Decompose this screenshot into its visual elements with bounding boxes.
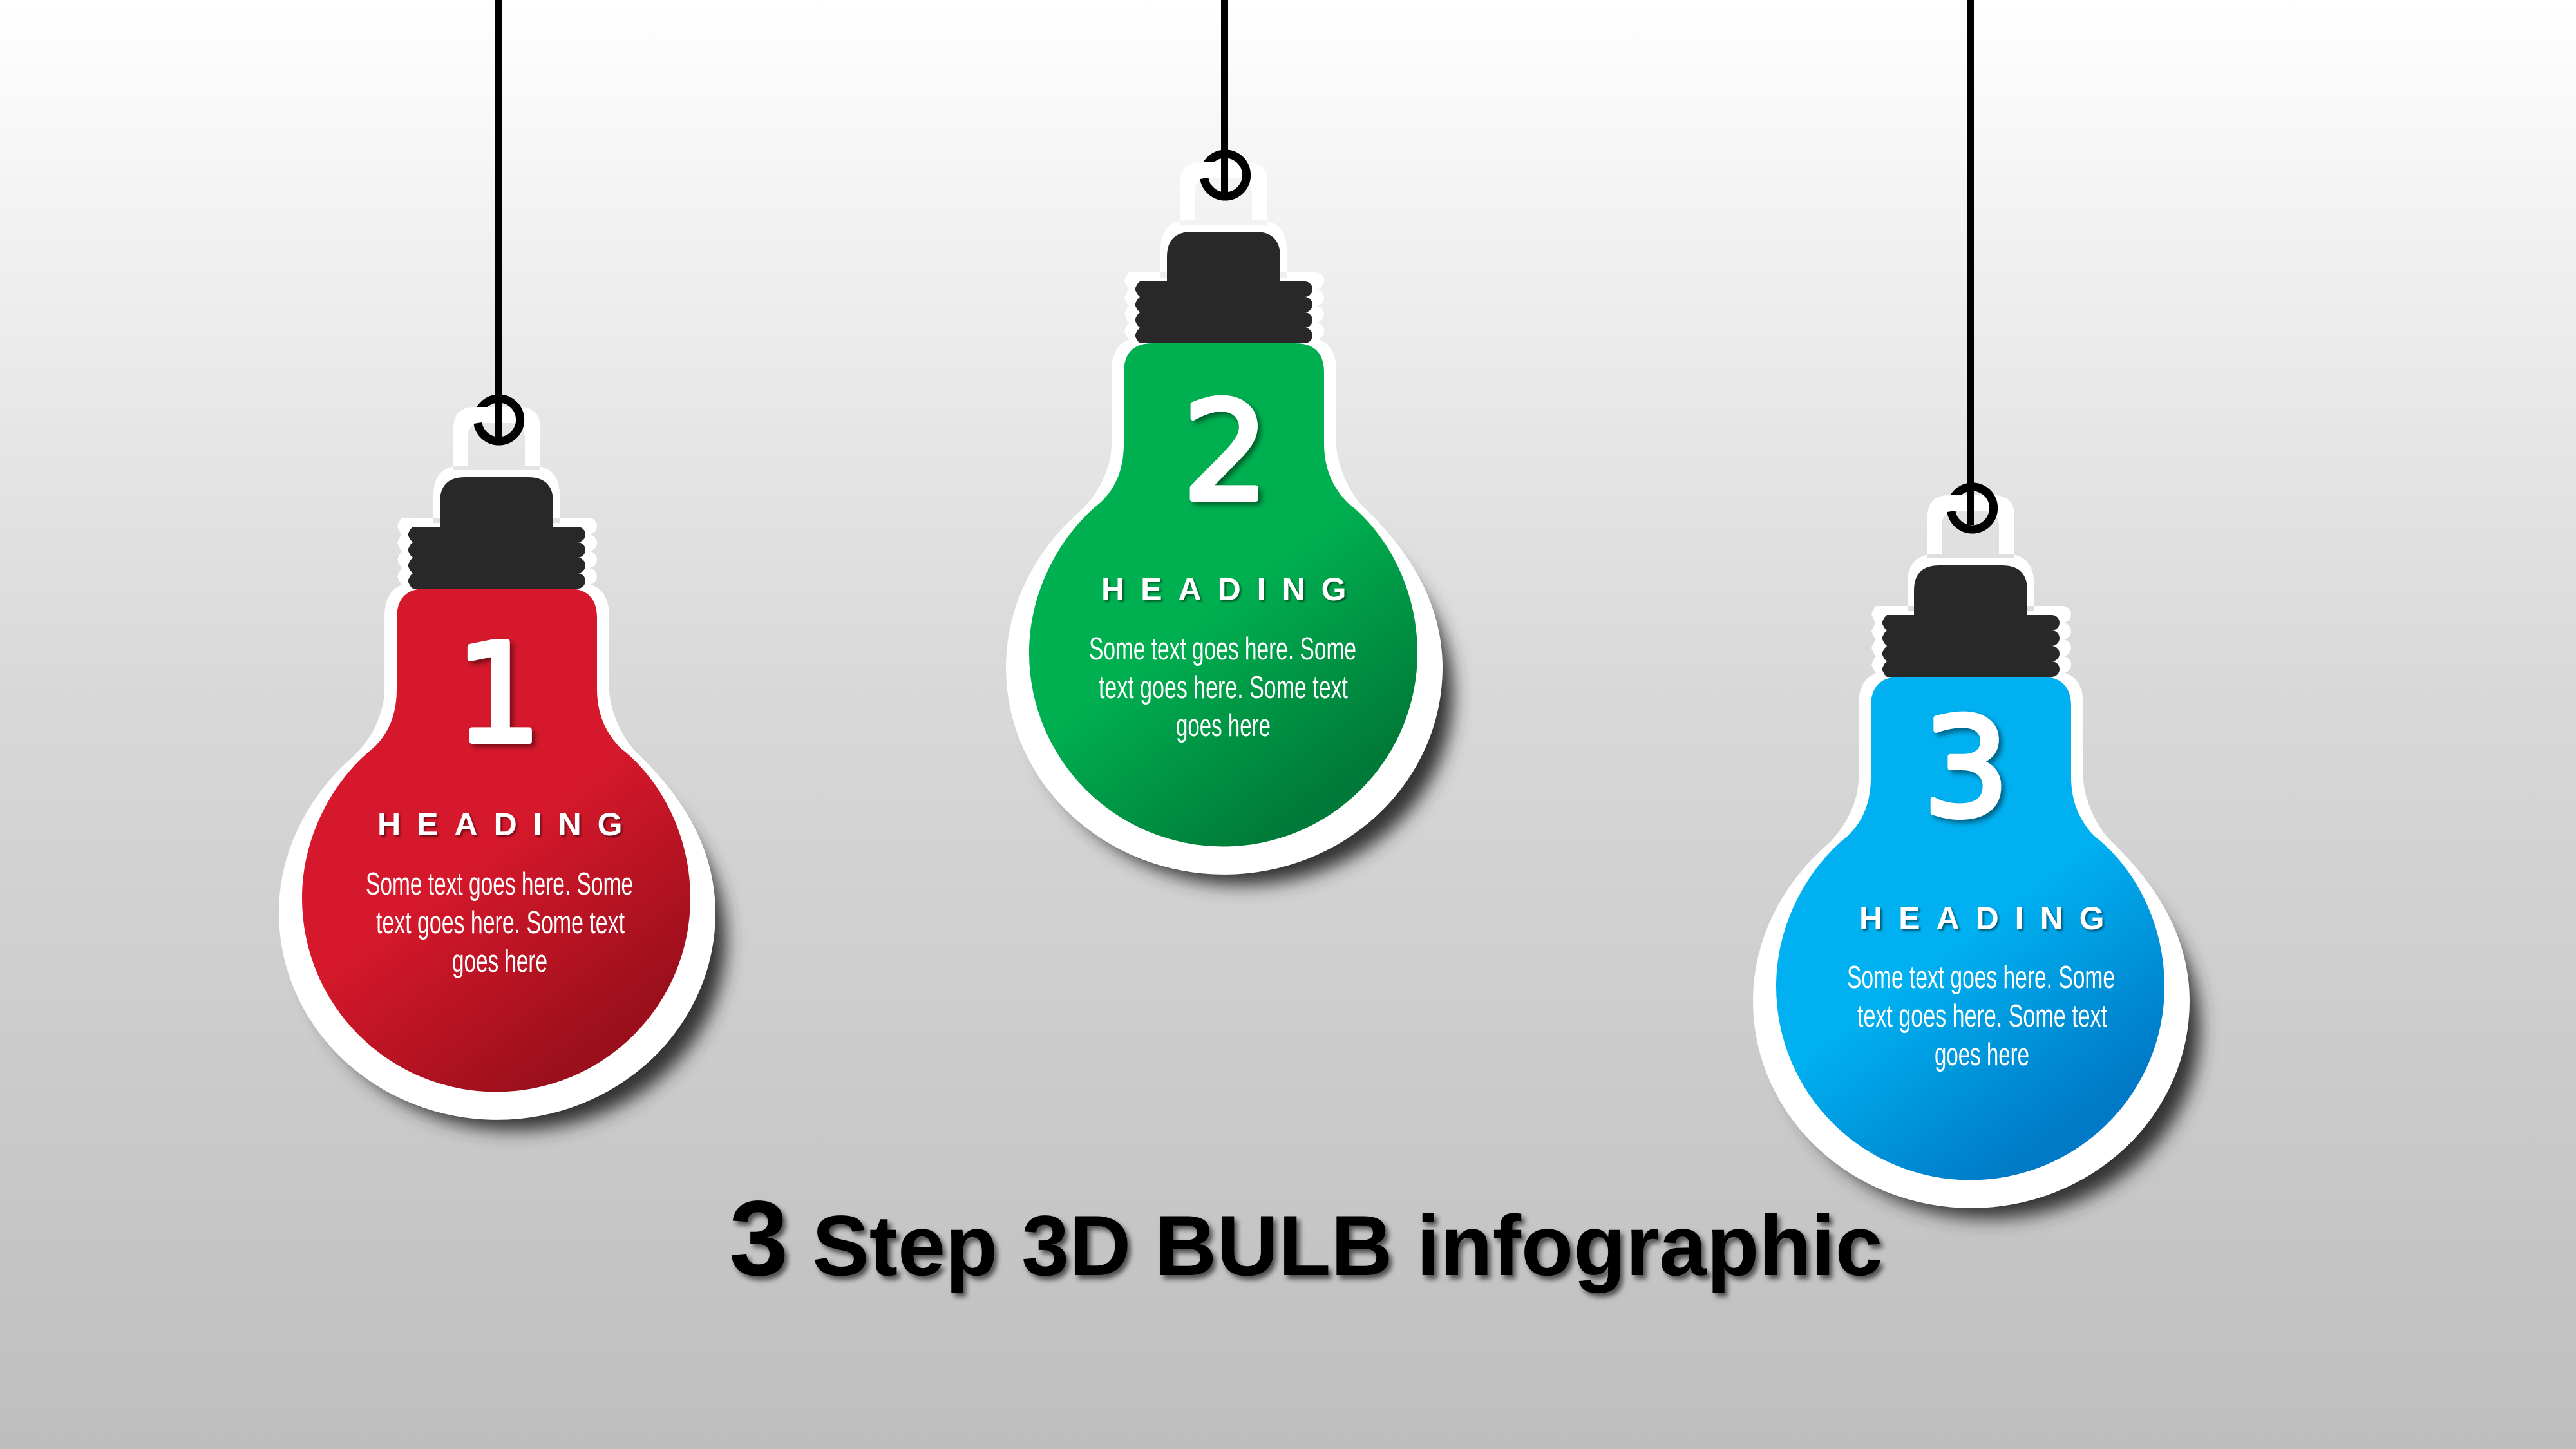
bulb 1 body text: goes here [452, 944, 547, 979]
bulb 3 white outline [1753, 671, 2190, 1208]
bulb 3 body text [1847, 960, 2115, 1072]
bulb 3: blue [1753, 0, 2200, 1218]
bulb 2 white hanger and cap outline [1124, 162, 1324, 339]
bulb 2 body text: Some text goes here. Some [1089, 632, 1356, 667]
bulb 1 dark socket [408, 477, 585, 589]
bulb 2 body text [1089, 632, 1356, 743]
bulb 1 number: 1 [455, 614, 542, 773]
bulb 2 coloured body [1029, 343, 1417, 846]
bulb 2 white outline [1006, 337, 1443, 875]
bulb 2 ring [1204, 154, 1247, 196]
bulb 2: green [1006, 0, 1453, 885]
bulb 2 number: 2 [1182, 372, 1269, 531]
bulb 3 white hanger and cap outline [1871, 495, 2071, 673]
bulb 1 white outline [279, 583, 715, 1120]
bulb 1 ring front arc [478, 399, 520, 441]
bulb 2 shadow [1032, 505, 1453, 885]
bulb 3 ring [1951, 487, 1994, 529]
bulb 3 heading: HEADING [1859, 900, 2121, 936]
bulb 3 body text: text goes here. Some text [1857, 999, 2107, 1034]
bulb 2 heading: HEADING [1101, 571, 1363, 607]
bulb 1 heading: HEADING [377, 806, 639, 842]
bulb 1 body text: text goes here. Some text [376, 905, 625, 940]
bulb 1 ring [478, 399, 520, 441]
bulb 3 dark socket [1882, 565, 2060, 677]
bulb 1: red [279, 0, 726, 1130]
bulb 1 body text: Some text goes here. Some [366, 867, 633, 902]
bulb 3 coloured body [1776, 677, 2164, 1180]
bulb 2 ring front arc [1204, 154, 1247, 196]
bulb 3 shadow [1779, 838, 2200, 1218]
bulb 1 body text [366, 867, 633, 979]
bulb 3 body text: Some text goes here. Some [1847, 960, 2115, 995]
bulb 1 shadow [305, 750, 726, 1130]
bulb 3 string [1967, 0, 1974, 525]
bulb 1 white hanger and cap outline [397, 407, 597, 585]
title: 3 [729, 1179, 788, 1298]
bulb 3 number: 3 [1923, 688, 2009, 848]
bulb 2 body text: text goes here. Some text [1099, 670, 1348, 705]
bulb 2 string [1221, 0, 1228, 200]
bulb 2 body text: goes here [1176, 708, 1271, 743]
bulb 3 ring front arc [1951, 487, 1994, 529]
bulb 1 string [495, 0, 502, 445]
bulb 3 body text: goes here [1935, 1037, 2029, 1072]
bulb 1 coloured body [302, 589, 690, 1092]
title: Step 3D BULB infographic [812, 1198, 1883, 1294]
bulb 2 dark socket [1135, 232, 1312, 343]
